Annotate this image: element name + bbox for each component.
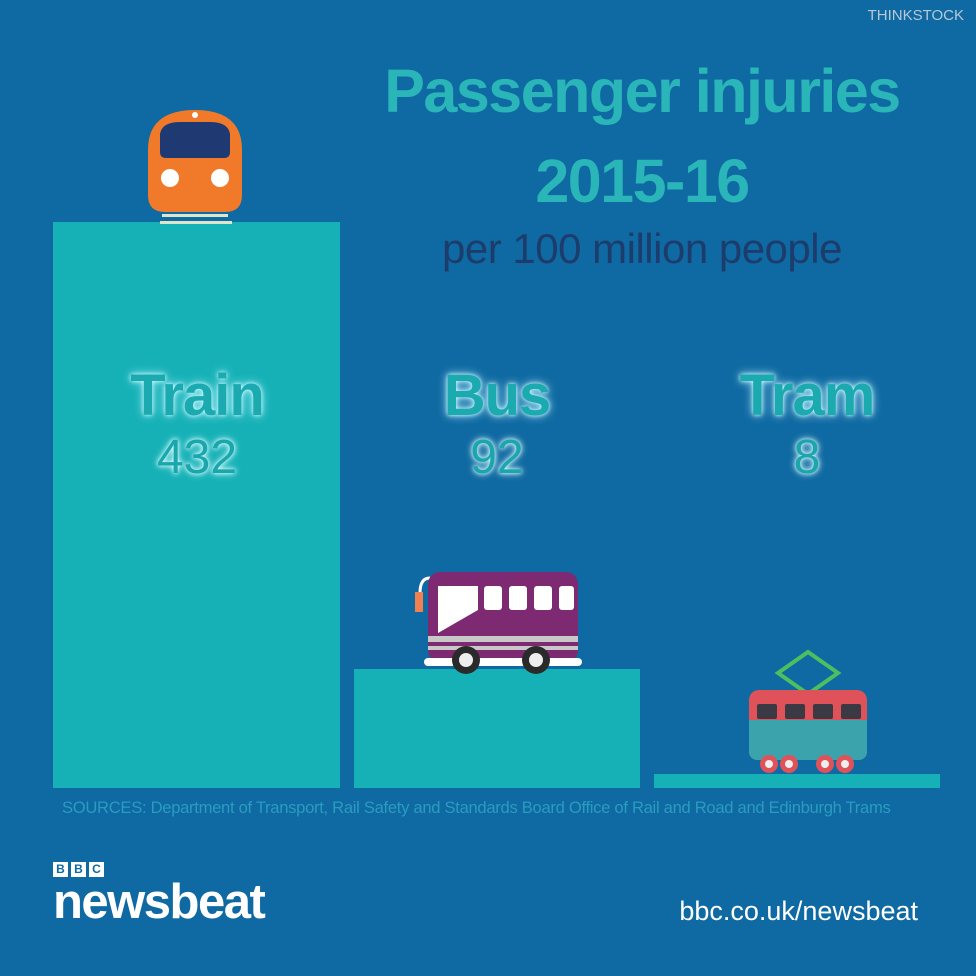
sources: SOURCES: Department of Transport, Rail Safety and Standards Board Office of Rail and Road and Edinburgh Trams bbox=[62, 798, 890, 817]
title bbox=[384, 57, 900, 215]
subtitle: per 100 million people bbox=[442, 225, 842, 272]
logo: BBC newsbeat: B bbox=[56, 862, 65, 876]
icon: bus bbox=[415, 572, 582, 674]
credit: THINKSTOCK bbox=[868, 7, 964, 24]
label: train: Train bbox=[130, 363, 264, 428]
label: bus: Bus bbox=[444, 363, 550, 428]
logo: BBC newsbeat: newsbeat bbox=[53, 875, 264, 929]
label: tram: Tram bbox=[740, 363, 874, 428]
icon: tram bbox=[749, 650, 867, 773]
title: 2015-16 bbox=[535, 147, 749, 215]
title: Passenger injuries bbox=[384, 57, 900, 125]
url: bbc.co.uk/newsbeat bbox=[679, 896, 918, 926]
value: bus: 92 bbox=[470, 431, 524, 484]
logo: BBC newsbeat: B bbox=[74, 862, 83, 876]
value: tram: 8 bbox=[794, 431, 820, 484]
bar: tram bbox=[654, 774, 940, 788]
bar: bus bbox=[354, 669, 640, 788]
logo: BBC newsbeat: C bbox=[92, 862, 101, 876]
bar: train bbox=[53, 222, 340, 788]
value: train: 432 bbox=[157, 431, 237, 484]
icon: train bbox=[148, 110, 242, 224]
